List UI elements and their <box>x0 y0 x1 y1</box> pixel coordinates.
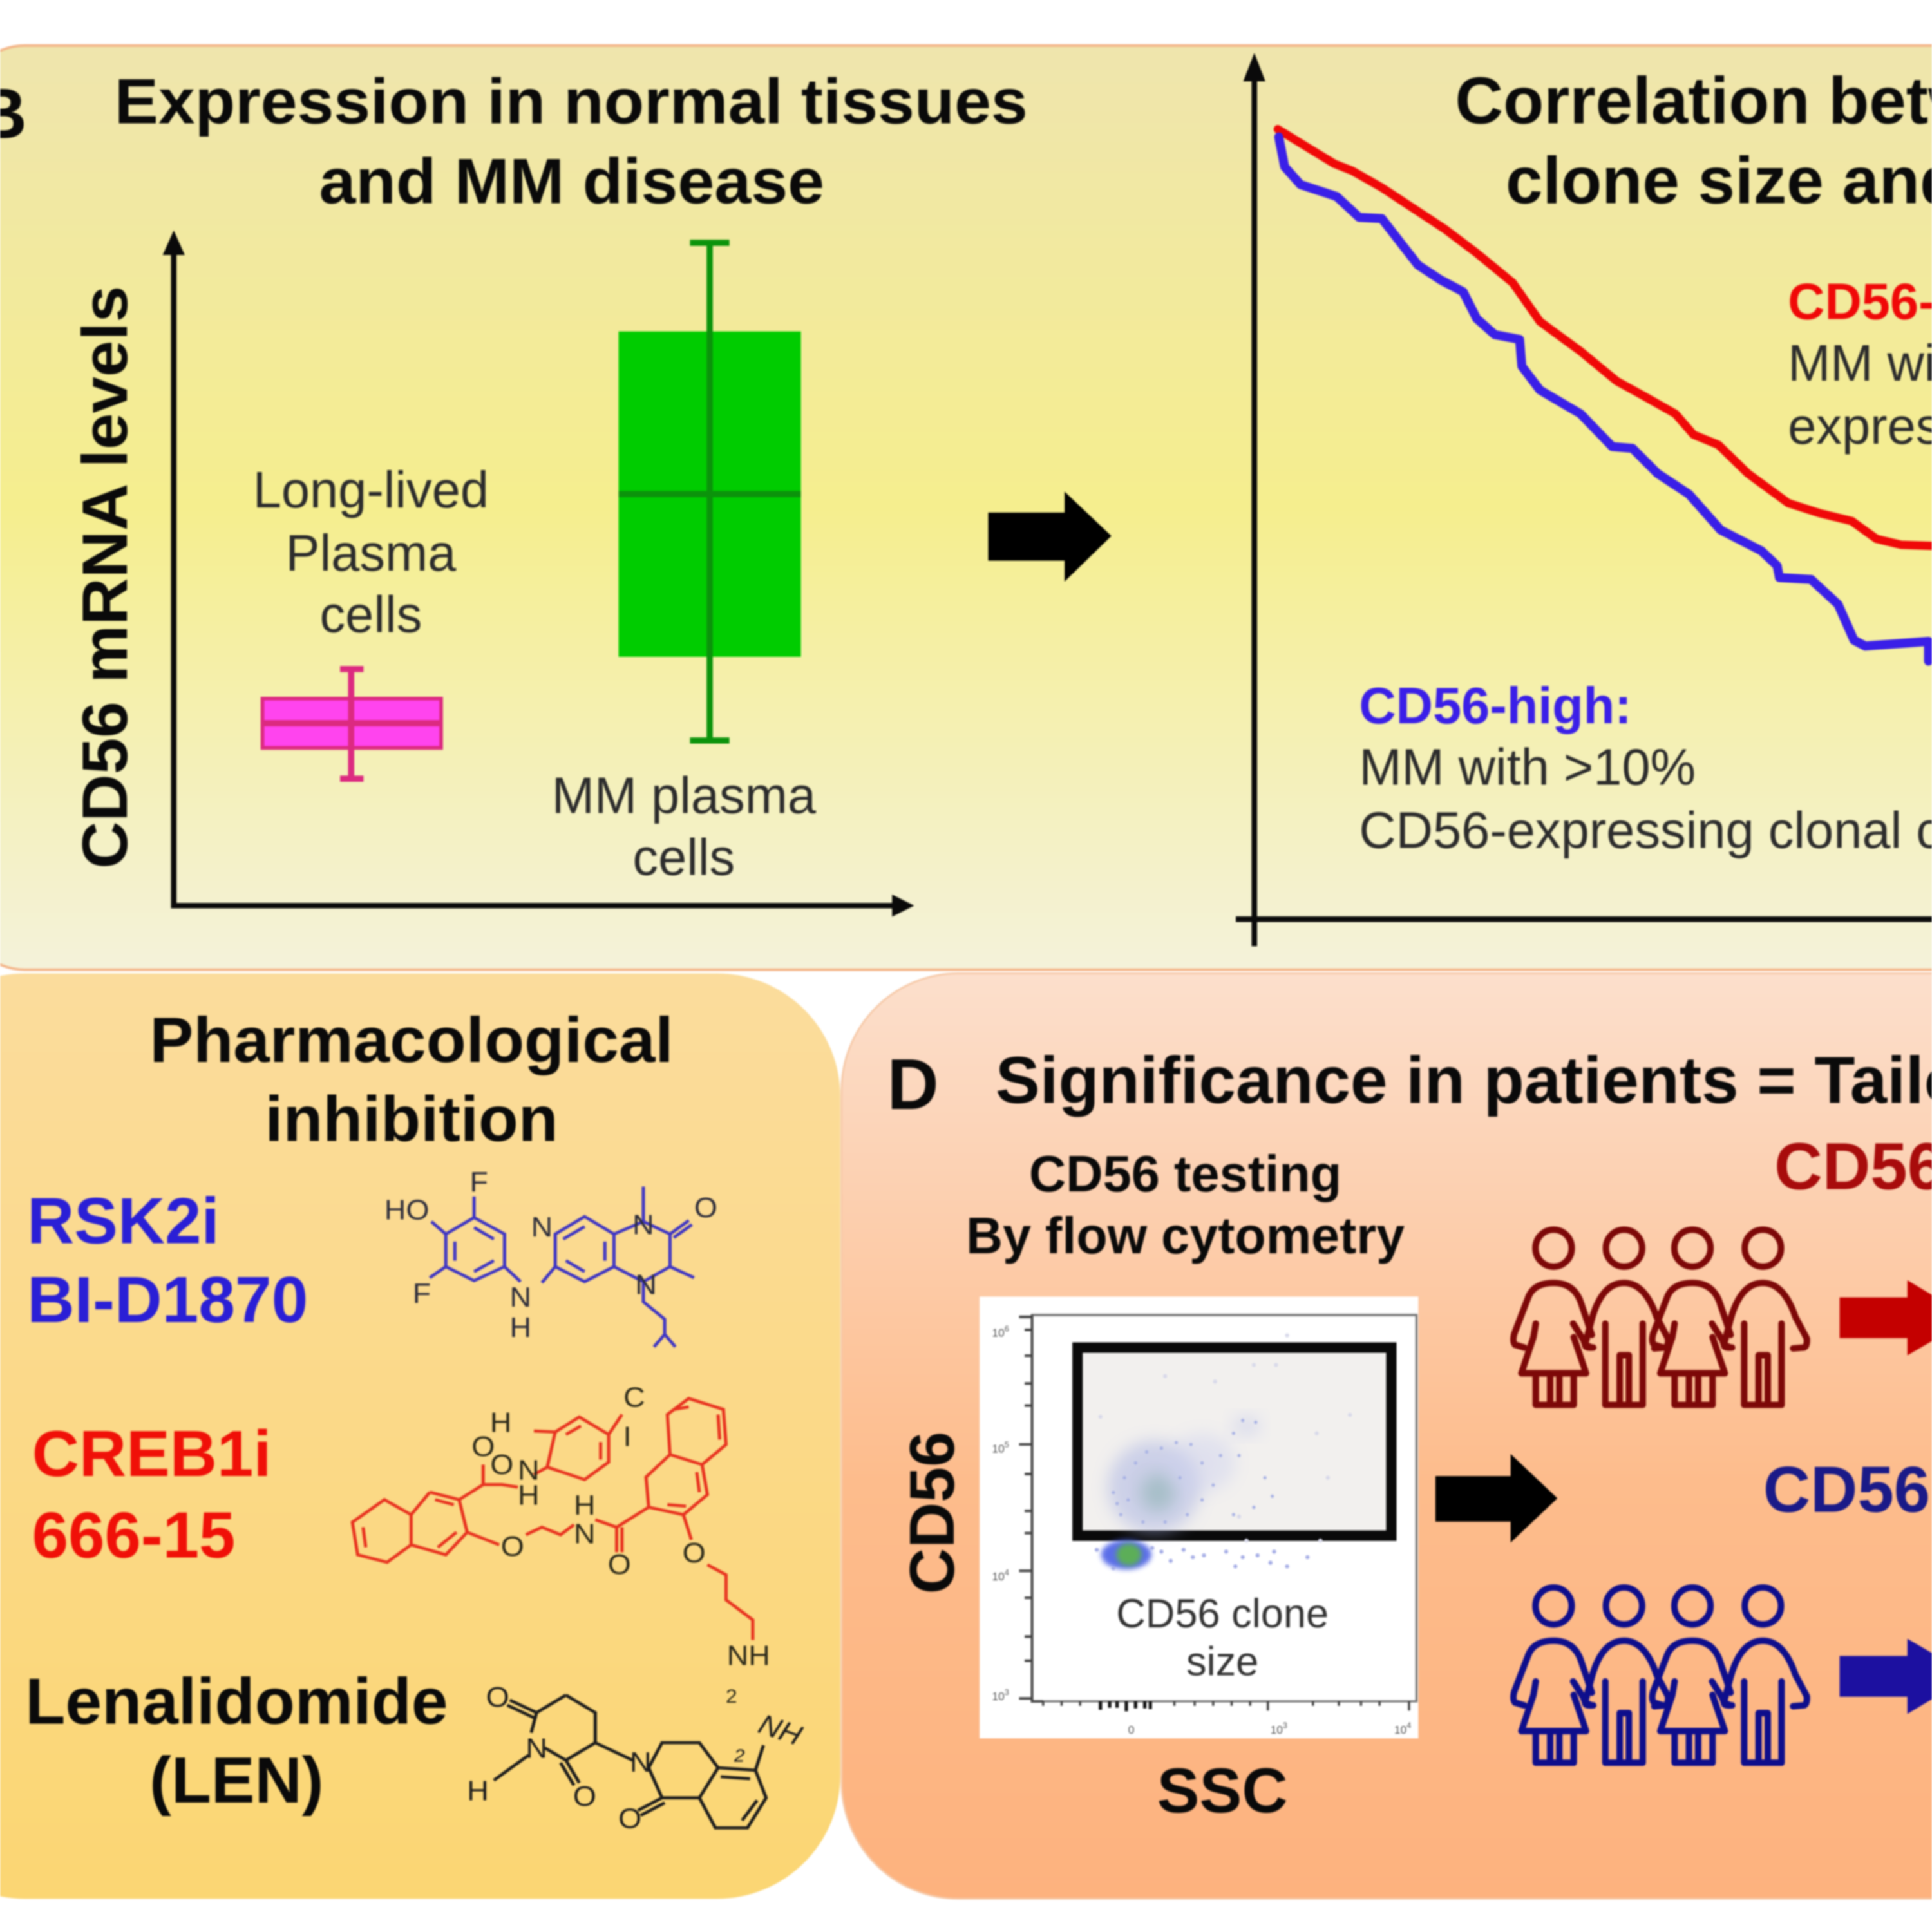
molecule: 666-15: 2 <box>726 1686 737 1707</box>
arrow: red <box>1840 1280 1932 1356</box>
label: MM plasma cells <box>552 767 817 886</box>
curve: CD56-high <box>1279 137 1929 661</box>
molecule: 666-15: I <box>623 1421 632 1452</box>
label: CD56 clone size: size <box>1186 1640 1258 1685</box>
tick labels <box>992 1324 1411 1736</box>
molecule: 666-15: H <box>490 1406 511 1438</box>
tick labels: 4 <box>1406 1721 1411 1730</box>
molecule: 666-15: O <box>490 1448 513 1481</box>
molecule: BI-D1870: HO <box>384 1194 430 1226</box>
heading: pharmacological inhibition <box>149 1005 674 1155</box>
arrow: blue <box>1840 1639 1932 1714</box>
box: MM plasma cells <box>618 243 801 741</box>
panel letter D: D <box>887 1045 939 1124</box>
molecule: 666-15: N <box>574 1518 596 1549</box>
label: lenalidomide: Lenalidomide <box>25 1665 448 1738</box>
arrow: testing to groups <box>1435 1454 1557 1542</box>
molecule: BI-D1870 <box>384 1166 717 1347</box>
scatter cloud <box>1097 1336 1350 1569</box>
y axis label: CD56 mRNA levels <box>70 286 141 869</box>
axis label: SSC: SSC <box>1157 1755 1288 1826</box>
label: RSK2i <box>27 1184 308 1336</box>
molecule: lenalidomide <box>467 1681 807 1834</box>
molecule: 666-15: H <box>518 1479 539 1511</box>
tick labels: 10 <box>992 1443 1005 1455</box>
molecule: 666-15: O <box>683 1537 706 1569</box>
plot frame and ticks <box>1019 1315 1416 1711</box>
patients: red group <box>1513 1229 1807 1405</box>
molecule: 666-15: H <box>574 1489 596 1521</box>
label: CD56 clone size <box>1116 1591 1329 1685</box>
arrow: to correlation <box>988 491 1112 582</box>
label: lenalidomide <box>25 1665 448 1817</box>
molecule: lenalidomide: 2 <box>734 1746 744 1766</box>
curve: CD56-low <box>1278 129 1932 548</box>
tick labels: 3 <box>1005 1688 1009 1697</box>
tick labels: 4 <box>1005 1568 1009 1577</box>
molecule: BI-D1870: O <box>694 1191 717 1223</box>
heading: correlation <box>1455 62 1932 218</box>
heading: CD56 testing <box>966 1145 1405 1264</box>
heading: expression: Expression in normal tissues <box>115 66 1028 137</box>
survival chart axes <box>1236 53 1932 946</box>
tick labels: 10 <box>1271 1723 1283 1736</box>
tick labels: 10 <box>1394 1723 1406 1736</box>
molecule: lenalidomide: NH <box>754 1708 807 1752</box>
panel D: significance in patients <box>842 973 1932 1899</box>
molecule: BI-D1870: N <box>632 1209 654 1240</box>
molecule: BI-D1870: N <box>531 1211 553 1243</box>
molecule: 666-15: O <box>501 1530 524 1562</box>
tick labels: 10 <box>992 1570 1005 1583</box>
molecule: BI-D1870: N <box>635 1269 657 1300</box>
molecule: BI-D1870: F <box>469 1166 488 1198</box>
molecule: lenalidomide: N <box>526 1732 547 1764</box>
heading: CD56 testing: By flow cytometry <box>966 1207 1405 1264</box>
molecule: 666-15: N <box>518 1454 539 1486</box>
molecule: BI-D1870: N <box>510 1281 531 1313</box>
panel C: pharmacological inhibition <box>0 973 840 1899</box>
molecule: 666-15: NH <box>727 1640 770 1671</box>
box plot axes <box>163 231 914 916</box>
heading: CD56 testing: CD56 testing <box>1029 1145 1341 1202</box>
label: CD56 clone size: CD56 clone <box>1116 1591 1329 1636</box>
gate <box>1077 1348 1391 1536</box>
label: CREB1i <box>32 1417 272 1571</box>
molecule: 666-15: C <box>623 1381 645 1413</box>
tick labels: 6 <box>1005 1324 1009 1333</box>
heading: expression: and MM disease <box>319 146 824 218</box>
flow cytometry plot <box>896 1296 1418 1826</box>
tick labels: 5 <box>1005 1441 1009 1450</box>
molecule: lenalidomide: O <box>486 1681 509 1713</box>
tick labels: 10 <box>992 1326 1005 1339</box>
label: long-lived plasma cells: Plasma <box>286 524 457 582</box>
molecule: 666-15: O <box>471 1430 495 1463</box>
molecule: 666-15 <box>352 1381 770 1707</box>
patients: blue group <box>1513 1587 1807 1763</box>
label: CD56-low <box>1788 273 1932 455</box>
label: long-lived plasma cells: Long-lived <box>253 461 489 518</box>
label: long-lived plasma cells: cells <box>319 586 422 643</box>
label: CREB1i: 666-15 <box>32 1499 235 1571</box>
label: MM plasma cells: cells <box>632 828 735 886</box>
heading: pharmacological inhibition: Pharmacological <box>149 1005 674 1076</box>
tick labels: 0 <box>1128 1723 1134 1736</box>
tick labels: 3 <box>1283 1721 1287 1730</box>
label: long-lived plasma cells <box>253 461 489 643</box>
molecule: lenalidomide: O <box>618 1803 641 1834</box>
heading: pharmacological inhibition: inhibition <box>265 1084 558 1155</box>
molecule: lenalidomide: N <box>630 1747 652 1778</box>
molecule: BI-D1870: H <box>510 1311 531 1343</box>
label: CD56-high <box>1359 677 1932 858</box>
tick labels: 10 <box>992 1690 1005 1703</box>
label: RSK2i: RSK2i <box>27 1184 220 1257</box>
molecule: BI-D1870: F <box>413 1277 431 1309</box>
axis label: CD56: CD56 <box>896 1432 967 1594</box>
label: CREB1i: CREB1i <box>32 1417 272 1490</box>
label: CD56-high: CD56-high: <box>1359 677 1632 734</box>
label: lenalidomide: (LEN) <box>149 1744 324 1817</box>
label: RSK2i: BI-D1870 <box>27 1264 308 1336</box>
molecule: lenalidomide: O <box>573 1780 596 1812</box>
panel B: expression in normal tissues and MM disease <box>0 46 1932 970</box>
survival curves <box>1278 129 1932 661</box>
box: long-lived plasma cells <box>263 669 441 779</box>
label: CD56-high: MM with >10% <box>1359 739 1696 796</box>
label: MM plasma cells: MM plasma <box>552 767 817 824</box>
molecule: lenalidomide: H <box>467 1775 489 1806</box>
molecule: 666-15: O <box>608 1548 631 1580</box>
heading: expression <box>115 66 1028 218</box>
